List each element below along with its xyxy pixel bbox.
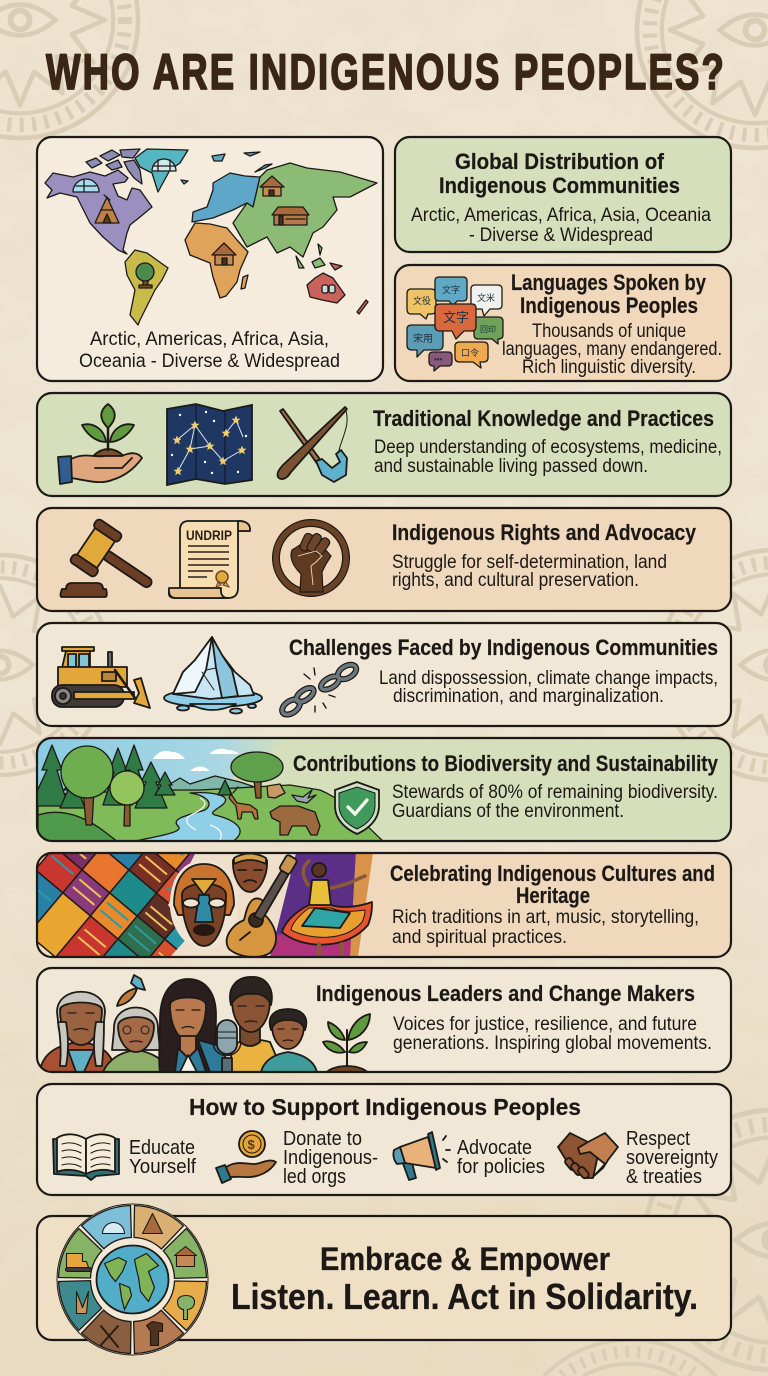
label: Donate to	[283, 1128, 362, 1150]
icon: Australia motif	[322, 285, 335, 293]
icon: speech bubbles: •••	[434, 355, 443, 364]
description	[392, 907, 699, 948]
heading	[390, 861, 715, 908]
panel: biodiversity	[30, 738, 731, 842]
map caption	[79, 329, 340, 372]
icon: shield with check	[335, 782, 379, 834]
icon: star map	[167, 404, 252, 485]
description	[392, 552, 667, 591]
icon: igloo Greenland	[152, 159, 176, 171]
heading: Indigenous Rights and Advocacy	[392, 520, 697, 545]
icon: UNDRIP scroll	[169, 521, 250, 598]
wheel icons	[66, 1214, 196, 1348]
panel: traditional knowledge	[37, 393, 731, 496]
icon: bulldozer	[52, 647, 150, 708]
icon: elder woman	[102, 1006, 159, 1071]
item: advocate	[393, 1132, 545, 1180]
description: rights, and cultural preservation.	[392, 570, 639, 591]
item: donate	[216, 1128, 378, 1188]
heading: Challenges Faced by Indigenous Communities	[289, 635, 718, 660]
description: - Diverse & Widespread	[469, 225, 653, 246]
description	[411, 205, 711, 246]
panel: challenges	[37, 623, 731, 726]
globe	[96, 1246, 168, 1314]
description	[393, 1014, 712, 1054]
heading	[511, 270, 707, 318]
heading: Languages Spoken by	[511, 270, 707, 295]
description: discrimination, and marginalization.	[393, 686, 664, 707]
purple backdrop	[270, 853, 356, 957]
icon: raised fist	[276, 523, 346, 593]
illustration: art, music and dance	[38, 854, 373, 956]
heading: Celebrating Indigenous Cultures and	[390, 861, 715, 886]
description: generations. Inspiring global movements.	[393, 1033, 712, 1054]
icon: tipi	[95, 195, 119, 223]
icon: hut	[260, 176, 284, 196]
label: Advocate	[457, 1137, 532, 1159]
label	[457, 1137, 545, 1178]
map caption: Arctic, Americas, Africa, Asia,	[90, 329, 329, 350]
heading	[439, 149, 680, 198]
heading: Traditional Knowledge and Practices	[373, 406, 714, 431]
heading: Indigenous Communities	[439, 173, 680, 198]
textile quilt	[38, 854, 195, 956]
icon: bear	[270, 806, 320, 835]
icon: melting iceberg	[164, 637, 262, 714]
heading: Indigenous Leaders and Change Makers	[316, 981, 695, 1006]
panel: cultures and heritage	[36, 852, 732, 958]
description: Stewards of 80% of remaining biodiversity.	[392, 782, 718, 803]
icon: feather and butterfly	[117, 975, 145, 1006]
icon: seedling	[322, 1013, 371, 1071]
description: and sustainable living passed down.	[374, 456, 648, 477]
description: languages, many endangered.	[502, 339, 722, 360]
heading: Heritage	[516, 883, 590, 908]
icon: gavel	[60, 518, 165, 606]
icon: dancer	[282, 861, 372, 957]
description: Struggle for self-determination, land	[392, 552, 667, 573]
label: sovereignty	[626, 1147, 718, 1169]
icon: elder man	[40, 992, 116, 1072]
description: Land dispossession, climate change impacts,	[379, 668, 718, 689]
item: donate: $	[248, 1137, 256, 1152]
label: Respect	[626, 1128, 690, 1150]
icon: large mask	[170, 863, 235, 947]
heading: How to Support Indigenous Peoples	[189, 1094, 581, 1120]
panel: closing call to action	[37, 1191, 731, 1368]
icon: microphone	[213, 1020, 241, 1072]
icon: speech bubbles: 文役	[413, 295, 431, 306]
icon: fishing tools	[277, 407, 347, 482]
icon: speech bubbles: 文字	[442, 284, 460, 295]
illustration: group of leaders	[40, 974, 371, 1071]
icon: small animal	[267, 784, 285, 798]
item: educate	[53, 1134, 196, 1180]
description: Rich linguistic diversity.	[522, 357, 696, 378]
icon: broken chain	[279, 662, 359, 718]
icon: bird	[292, 790, 316, 803]
description: Arctic, Americas, Africa, Asia, Oceania	[411, 205, 711, 226]
illustration: landscape	[30, 739, 384, 842]
closing text: Embrace & Empower	[320, 1241, 610, 1277]
icon: open book	[53, 1134, 119, 1180]
icon: hand holding seedling	[58, 404, 142, 484]
icon: handshake	[558, 1133, 618, 1180]
icon: community wheel with globe	[44, 1191, 221, 1368]
description	[379, 668, 718, 707]
description: Rich traditions in art, music, storytelling,	[392, 907, 699, 928]
label	[626, 1128, 718, 1188]
description	[374, 437, 722, 477]
icon: man	[229, 976, 276, 1071]
label: Yourself	[129, 1156, 196, 1178]
label	[129, 1137, 196, 1178]
description	[502, 321, 722, 378]
icon: guitar	[227, 854, 298, 957]
icon: speech bubbles: 口令	[461, 347, 479, 358]
label: for policies	[457, 1156, 545, 1178]
description: Deep understanding of ecosystems, medicine,	[374, 437, 722, 458]
item: respect	[558, 1128, 718, 1188]
map: continents	[45, 149, 377, 325]
map caption: Oceania - Diverse & Widespread	[79, 351, 340, 372]
icon: speech bubbles	[407, 277, 503, 371]
icon: small mask	[233, 854, 267, 892]
icon: deer	[228, 786, 258, 819]
label: led orgs	[283, 1166, 346, 1188]
icon: Africa hut	[212, 243, 236, 265]
icon: speech bubbles: 宋用	[413, 332, 433, 345]
heading: Global Distribution of	[455, 149, 665, 174]
icon: boy	[261, 1009, 317, 1072]
icon: igloo North America	[73, 179, 99, 192]
panel: global distribution	[395, 137, 731, 252]
heading: Indigenous Peoples	[520, 293, 698, 318]
label	[283, 1128, 378, 1188]
description: Voices for justice, resilience, and future	[393, 1014, 697, 1035]
closing text: Listen. Learn. Act in Solidarity.	[231, 1276, 698, 1317]
panel: rights and advocacy	[37, 508, 731, 611]
closing text	[231, 1241, 698, 1317]
description	[392, 782, 718, 822]
panel: languages	[395, 265, 731, 381]
icon: tree	[136, 263, 154, 288]
icon: UNDRIP scroll: UNDRIP	[186, 528, 232, 543]
description: Thousands of unique	[532, 321, 686, 342]
icon: hand with coin	[216, 1131, 276, 1183]
icon: megaphone	[393, 1132, 450, 1180]
icon: woman with long hair	[159, 979, 232, 1072]
panel: leaders	[37, 968, 731, 1086]
description: Guardians of the environment.	[392, 801, 624, 822]
icon: speech bubbles: 文字	[443, 310, 469, 325]
description: and spiritual practices.	[392, 927, 567, 948]
panel: world map	[37, 137, 383, 381]
label: & treaties	[626, 1166, 702, 1188]
icon: speech bubbles: 文米	[477, 292, 495, 303]
label: Educate	[129, 1137, 195, 1159]
label: Indigenous-	[283, 1147, 378, 1169]
panel: how to support	[37, 1084, 731, 1195]
icon: speech bubbles: 回印	[480, 325, 496, 334]
icon: longhouse	[272, 207, 309, 225]
